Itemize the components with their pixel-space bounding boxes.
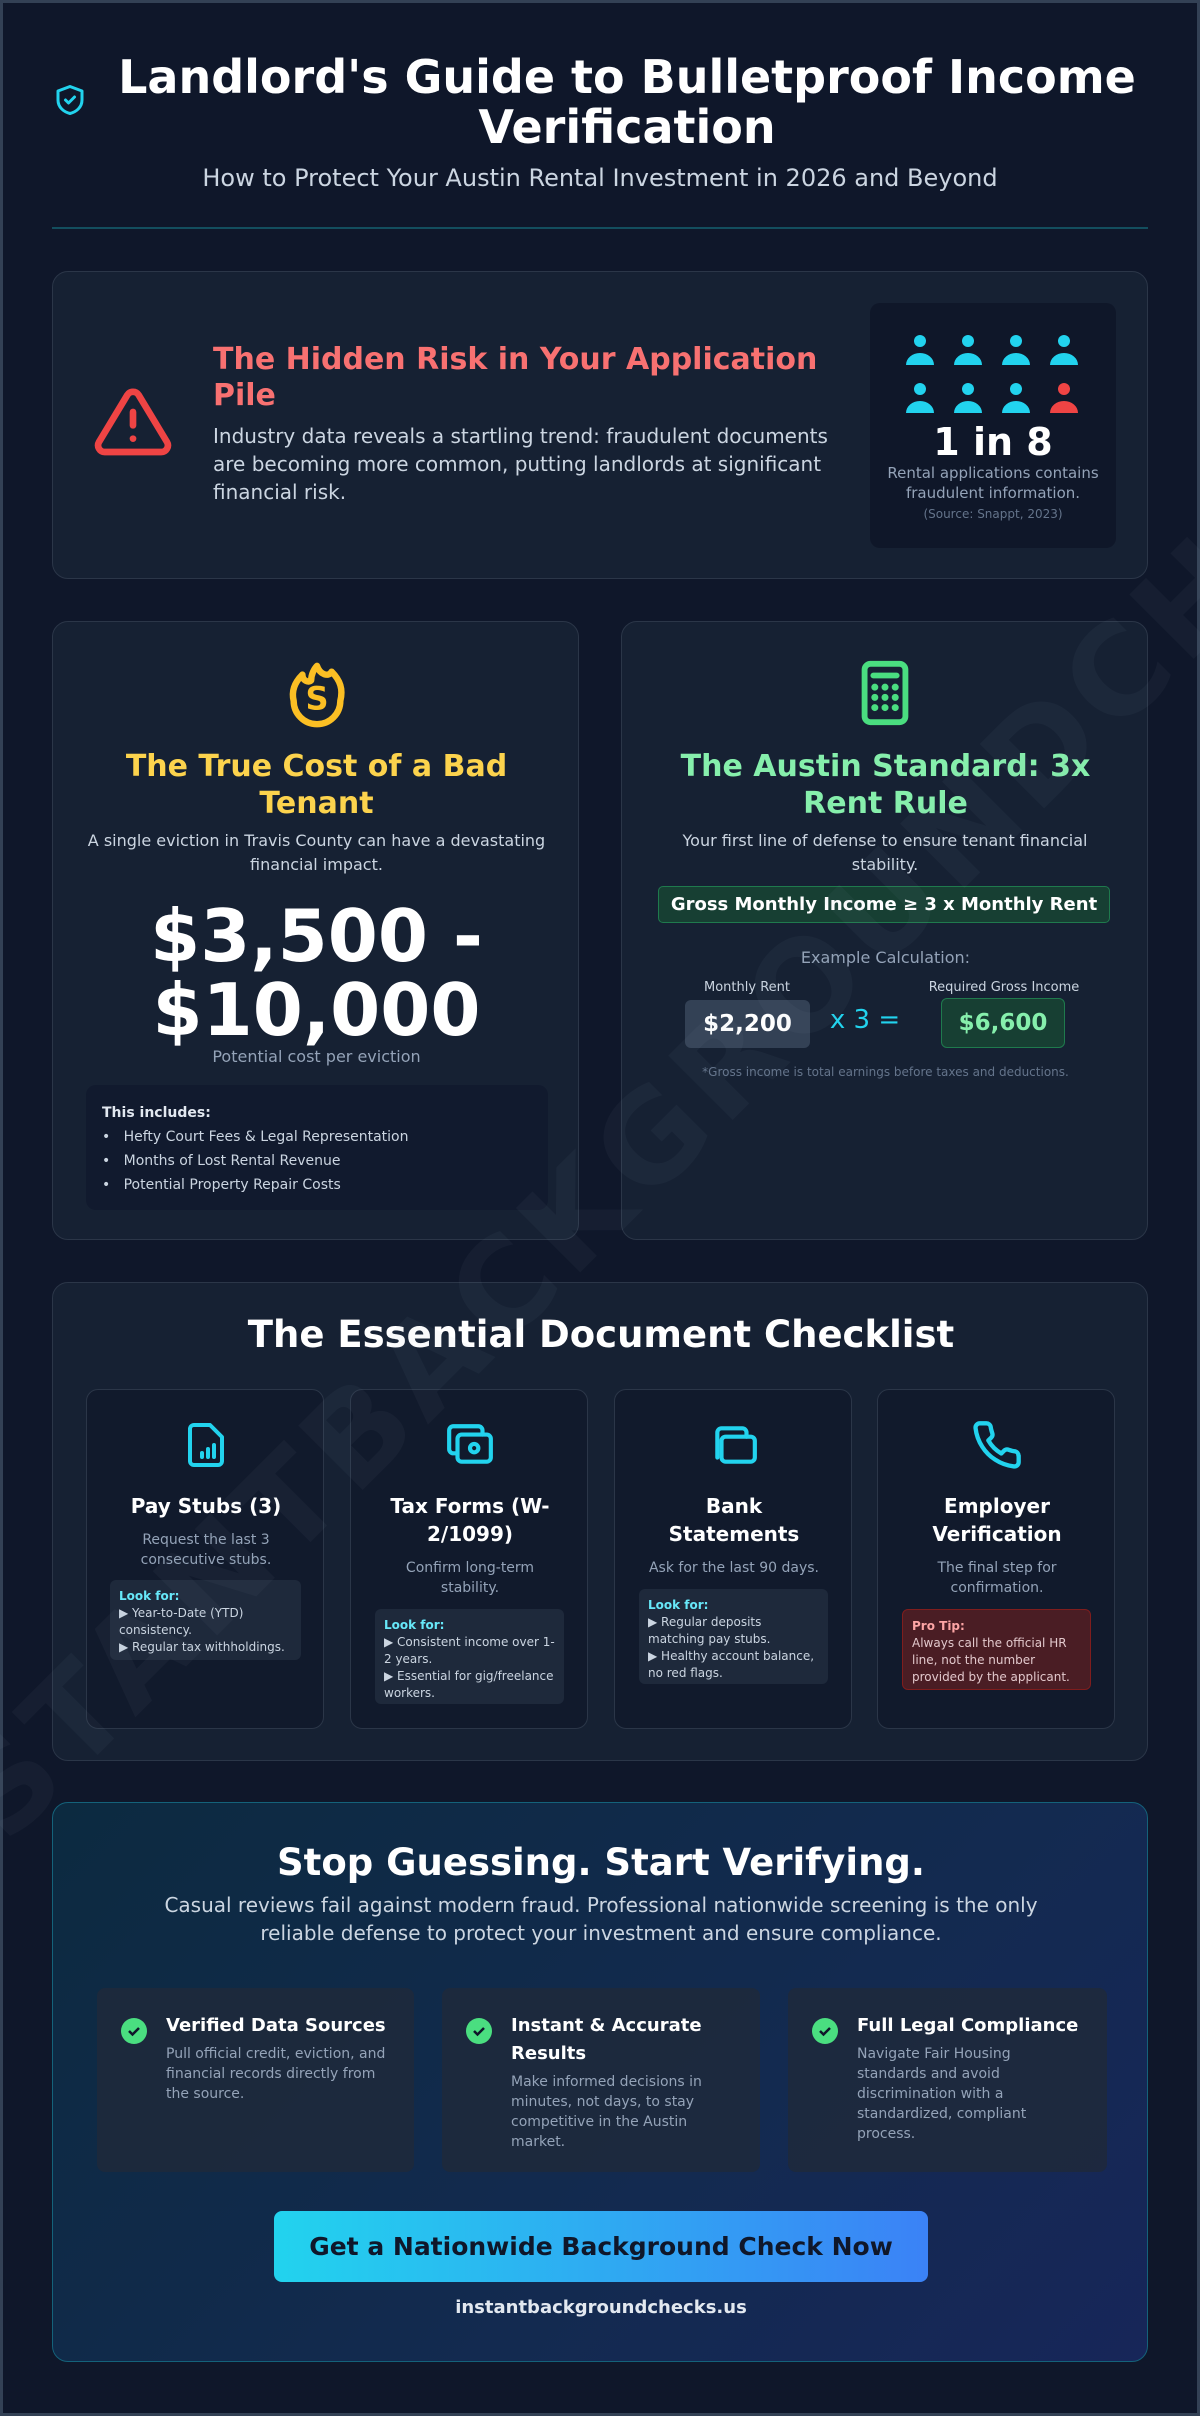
text: Your first line of defense to ensure tenant financial stability. — [683, 831, 1087, 874]
card: employer verification: Pro Tip: — [912, 1619, 965, 1633]
text: Casual reviews fail against modern fraud. Professional nationwide screening is the only reliable defense to protect your investment and ensure compliance. — [164, 1893, 1038, 1945]
button: Get a Nationwide Background Check Now — [309, 2232, 893, 2261]
panel: document checklist — [52, 1282, 1148, 1761]
card: bank statements: Ask for the last 90 days. — [649, 1560, 819, 1576]
card: employer verification — [877, 1389, 1115, 1729]
calc example: Required Gross Income — [929, 980, 1079, 995]
big number: $3,500 - — [150, 894, 483, 978]
heading: Stop Guessing. Start Verifying. — [277, 1841, 925, 1884]
stat box: 1 in 8: 1 in 8 — [933, 420, 1053, 464]
includes box: • Hefty Court Fees & Legal Representation — [102, 1129, 408, 1145]
calc example: x 3 = — [830, 1005, 900, 1035]
card: employer verification: The final step for confirmation. — [937, 1560, 1057, 1596]
card: bank statements: ▶ Healthy account balance, no red flags. — [648, 1649, 814, 1680]
card: pay stubs: Pay Stubs (3) — [131, 1494, 281, 1518]
card: pay stubs: Look for: — [119, 1589, 179, 1603]
icon: shield — [56, 85, 84, 115]
heading: The Austin Standard: 3x Rent Rule — [681, 749, 1090, 821]
big number: $10,000 — [153, 968, 480, 1052]
card: pay stubs — [86, 1389, 324, 1729]
includes box — [86, 1085, 548, 1210]
title: Landlord's Guide to Bulletproof Income Verification — [118, 50, 1136, 154]
heading: The Essential Document Checklist — [248, 1313, 954, 1356]
calc example: $6,600 — [959, 1010, 1047, 1036]
calc example: Monthly Rent — [704, 980, 790, 995]
feature: instant results — [442, 1988, 760, 2172]
panel: hidden risk — [52, 271, 1148, 579]
card: pay stubs: Request the last 3 consecutive stubs. — [141, 1532, 271, 1568]
feature: instant results: Make informed decisions in minutes, not days, to stay competitive in the Austin market. — [511, 2074, 702, 2150]
card: tax forms: ▶ Essential for gig/freelance workers. — [384, 1669, 554, 1700]
calc example — [685, 980, 1079, 1048]
icon: money fire — [290, 662, 345, 728]
card: tax forms: Look for: — [384, 1618, 444, 1632]
heading: The Hidden Risk in Your Application Pile — [213, 342, 817, 413]
card: tax forms — [350, 1389, 588, 1729]
calc example: $2,200 — [703, 1011, 792, 1037]
includes box: • Potential Property Repair Costs — [102, 1177, 341, 1193]
people icons — [906, 335, 1078, 413]
feature: legal compliance: Full Legal Compliance — [857, 2015, 1078, 2036]
feature: verified data sources: Pull official credit, eviction, and financial records directly from the source. — [166, 2046, 385, 2102]
card: employer verification: Employer Verification — [932, 1494, 1062, 1546]
panel: true cost — [52, 621, 579, 1240]
icon: money fire: S — [305, 680, 329, 718]
panel: 3x rule — [621, 621, 1148, 1240]
text: A single eviction in Travis County can have a devastating financial impact. — [88, 831, 545, 874]
big number — [150, 894, 483, 1052]
formula — [658, 886, 1110, 923]
url: instantbackgroundchecks.us — [455, 2297, 747, 2318]
panel: call to action — [52, 1802, 1148, 2362]
stat box: 1 in 8 — [870, 303, 1116, 548]
card: bank statements: Look for: — [648, 1598, 708, 1612]
feature: verified data sources: Verified Data Sources — [166, 2015, 386, 2036]
panel: true cost: Potential cost per eviction — [212, 1047, 421, 1066]
stat box: 1 in 8: (Source: Snappt, 2023) — [923, 507, 1063, 521]
feature: instant results: Instant & Accurate Results — [511, 2015, 702, 2064]
feature: legal compliance — [788, 1988, 1107, 2172]
formula: Gross Monthly Income ≥ 3 x Monthly Rent — [671, 894, 1097, 915]
card: bank statements: ▶ Regular deposits matching pay stubs. — [648, 1615, 770, 1646]
card: bank statements — [614, 1389, 852, 1729]
card: tax forms: ▶ Consistent income over 1-2 years. — [384, 1635, 555, 1666]
stat box: 1 in 8: Rental applications contains fraudulent information. — [887, 464, 1099, 502]
card: employer verification: Always call the official HR line, not the number provided by the applicant. — [912, 1636, 1070, 1684]
feature: verified data sources — [97, 1988, 414, 2172]
card: bank statements: Bank Statements — [669, 1494, 799, 1546]
card: tax forms: Tax Forms (W-2/1099) — [390, 1494, 550, 1546]
subtitle: How to Protect Your Austin Rental Investment in 2026 and Beyond — [202, 164, 998, 192]
panel: 3x rule: Example Calculation: — [801, 948, 970, 967]
icon: calculator — [862, 660, 908, 726]
card: pay stubs: ▶ Year-to-Date (YTD) consistency. — [119, 1606, 243, 1637]
card: pay stubs: ▶ Regular tax withholdings. — [119, 1640, 285, 1654]
panel: 3x rule: *Gross income is total earnings before taxes and deductions. — [702, 1065, 1069, 1079]
heading: The True Cost of a Bad Tenant — [126, 749, 507, 821]
button — [274, 2211, 928, 2282]
feature: legal compliance: Navigate Fair Housing standards and avoid discrimination with a standardized, compliant process. — [857, 2046, 1026, 2142]
includes box: • Months of Lost Rental Revenue — [102, 1153, 340, 1169]
icon: warning — [94, 388, 172, 456]
text: Industry data reveals a startling trend: fraudulent documents are becoming more common, putting landlords at significant financial risk. — [213, 424, 828, 504]
includes box: This includes: — [102, 1105, 211, 1121]
card: tax forms: Confirm long-term stability. — [406, 1560, 534, 1596]
